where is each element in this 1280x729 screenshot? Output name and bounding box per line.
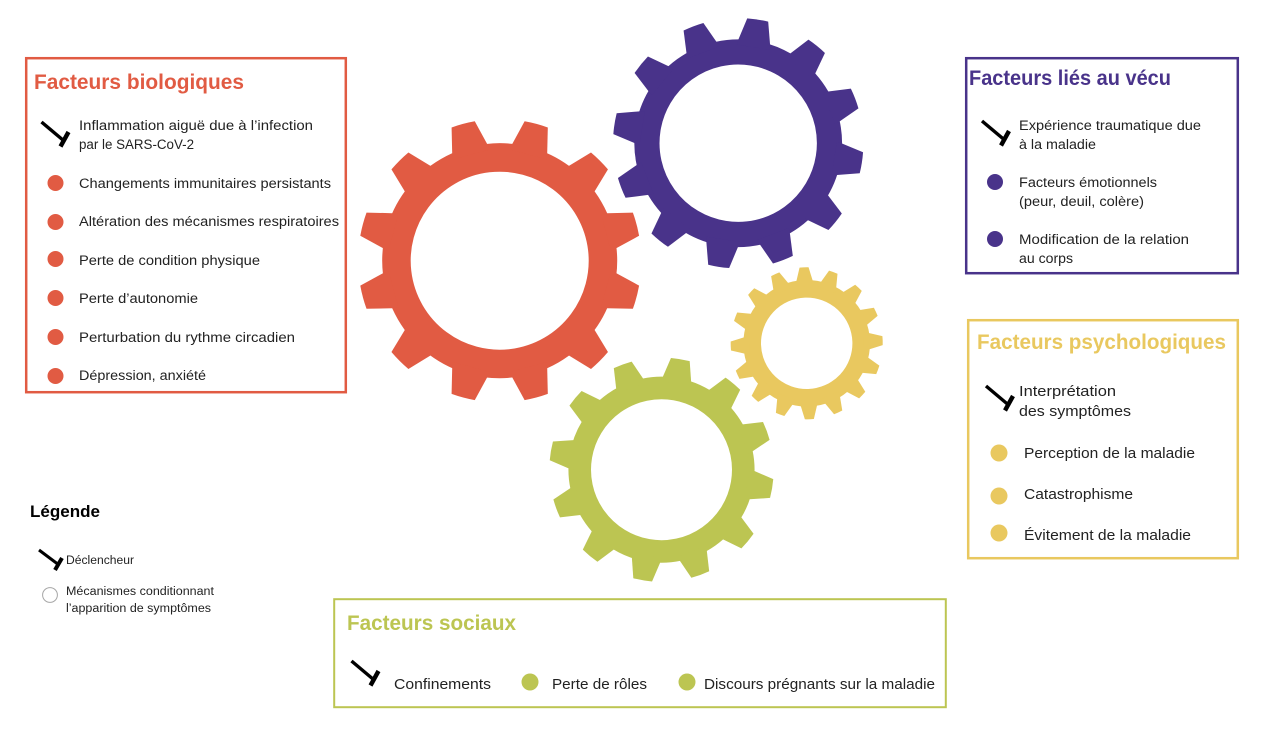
bullet bbox=[48, 329, 64, 345]
text: apparition: l’apparition de symptômes bbox=[66, 603, 211, 615]
text: interprétation: Interprétation bbox=[1019, 383, 1116, 400]
text: dépression: Dépression, anxiété bbox=[79, 368, 206, 384]
text: autonomie: Perte d’autonomie bbox=[79, 291, 198, 307]
text: facteurs émotionnels: Facteurs émotionnels bbox=[1019, 175, 1157, 191]
bullet bbox=[990, 488, 1008, 504]
text: condition physique: Perte de condition physique bbox=[79, 253, 260, 269]
heading: facteurs sociaux: Facteurs sociaux bbox=[347, 612, 516, 635]
icon: trigger bbox=[42, 122, 68, 146]
icon: trigger bbox=[982, 121, 1009, 146]
text: catastrophisme: Catastrophisme bbox=[1024, 486, 1133, 503]
text: rythme circadien: Perturbation du rythme circadien bbox=[79, 330, 295, 346]
icon: trigger bbox=[39, 550, 62, 570]
panel: facteurs psychologiques bbox=[968, 320, 1238, 558]
bullet bbox=[987, 231, 1003, 247]
bullet bbox=[678, 674, 696, 690]
text: évitement: Évitement de la maladie bbox=[1024, 527, 1191, 544]
text: changements immunitaires: Changements immunitaires persistants bbox=[79, 176, 331, 192]
icon: trigger bbox=[986, 386, 1013, 410]
bullet bbox=[48, 214, 64, 230]
bullet bbox=[48, 251, 64, 267]
text: modification relation: Modification de la relation bbox=[1019, 232, 1189, 248]
text: confinements: Confinements bbox=[394, 676, 491, 693]
bullet bbox=[48, 290, 64, 306]
heading: légende: Légende bbox=[30, 502, 100, 521]
gear: social (green) bbox=[532, 340, 791, 599]
icon: trigger bbox=[352, 661, 378, 686]
text: mécanismes: Mécanismes conditionnant bbox=[66, 586, 215, 598]
heading: facteurs psychologiques: Facteurs psychologiques bbox=[977, 331, 1226, 354]
text: inflammation line 2: par le SARS-CoV-2 bbox=[79, 137, 194, 153]
icon: empty circle bbox=[43, 588, 57, 602]
gear: psychological (yellow) bbox=[728, 265, 885, 422]
panel: facteurs liés au vécu bbox=[966, 58, 1238, 273]
text: perte de rôles: Perte de rôles bbox=[552, 676, 647, 693]
text: déclencheur: Déclencheur bbox=[66, 555, 134, 567]
text: expérience traumatique: Expérience traumatique due bbox=[1019, 118, 1201, 134]
text: perception: Perception de la maladie bbox=[1024, 445, 1195, 462]
text: à la maladie: à la maladie bbox=[1019, 137, 1096, 153]
gear: biological (red) bbox=[326, 87, 673, 434]
bullet bbox=[522, 674, 538, 690]
text: mécanismes respiratoires: Altération des mécanismes respiratoires bbox=[79, 214, 339, 230]
text: discours: Discours prégnants sur la maladie bbox=[704, 676, 935, 693]
legend bbox=[30, 502, 215, 615]
heading: facteurs biologiques: Facteurs biologiques bbox=[34, 71, 244, 94]
text: peur deuil colère: (peur, deuil, colère) bbox=[1019, 194, 1144, 210]
heading: facteurs liés au vécu: Facteurs liés au vécu bbox=[969, 67, 1171, 90]
text: des symptômes: des symptômes bbox=[1019, 403, 1131, 420]
bullet bbox=[987, 174, 1003, 190]
text: inflammation: Inflammation aiguë due à l’infection bbox=[79, 118, 313, 134]
bullet bbox=[48, 175, 64, 191]
bullet bbox=[48, 368, 64, 384]
panel: facteurs sociaux bbox=[334, 599, 946, 707]
gear: lived experience (purple) bbox=[595, 0, 881, 286]
text: au corps: au corps bbox=[1019, 251, 1073, 267]
panel: facteurs biologiques bbox=[26, 58, 346, 392]
bullet bbox=[990, 524, 1008, 542]
bullet bbox=[990, 444, 1008, 462]
